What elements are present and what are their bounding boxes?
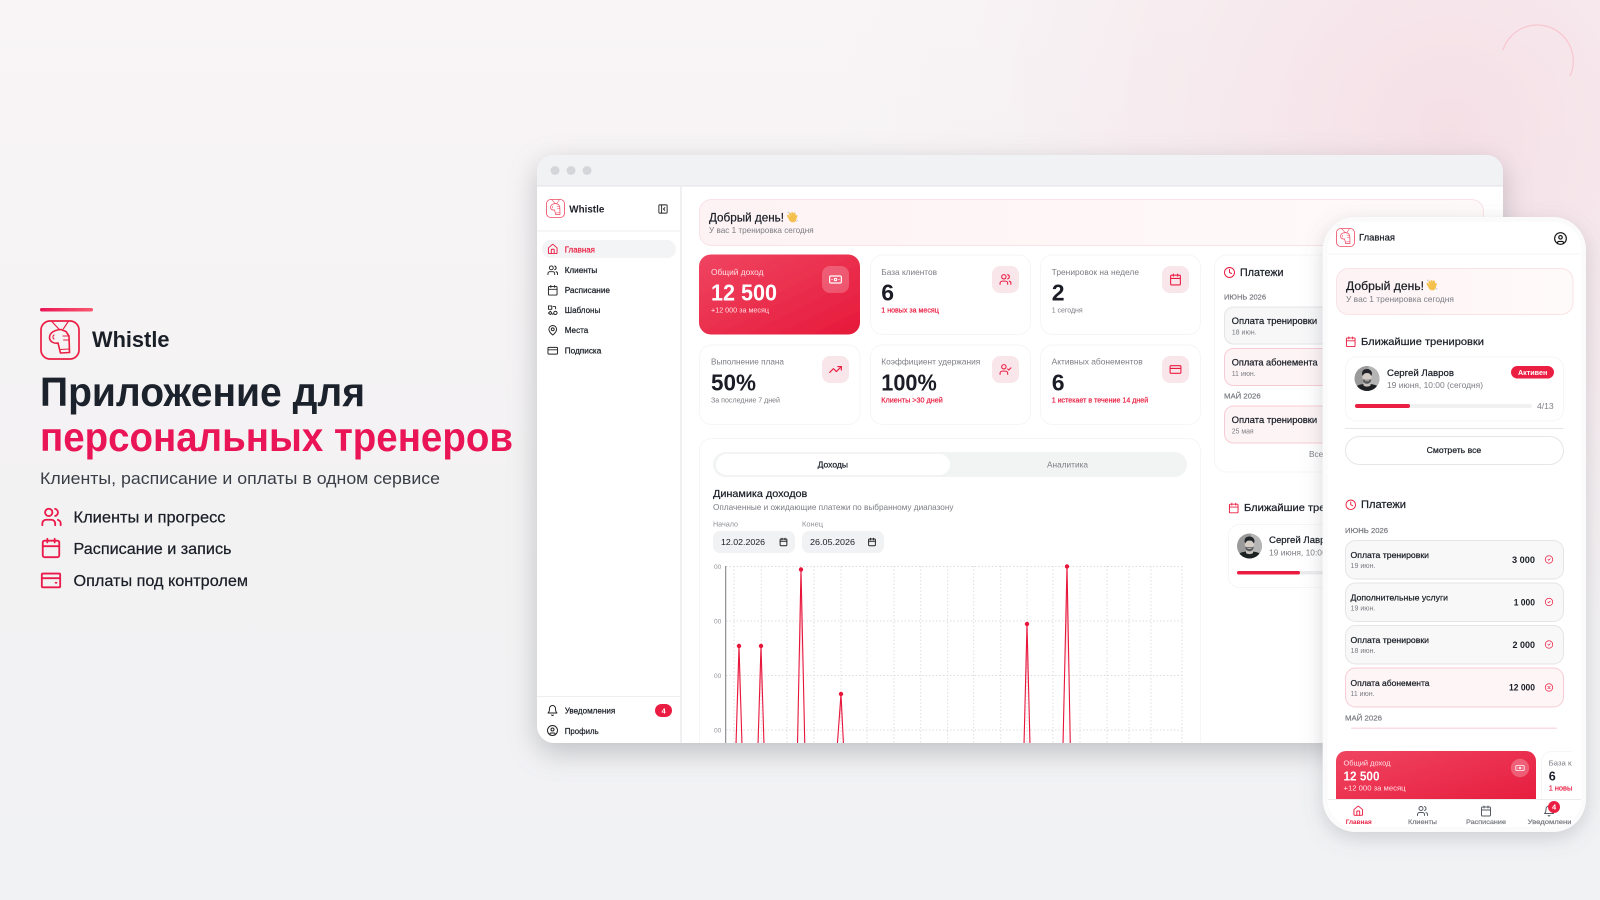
payment row: 19 июн. xyxy=(1350,561,1376,570)
stat card: total income: +12 000 за месяц xyxy=(711,306,770,315)
stat card: weekly workouts: 1 сегодня xyxy=(1052,306,1083,315)
tab: notifications: 4 xyxy=(1552,803,1557,812)
payment row: 18 июн. xyxy=(1232,327,1257,336)
greeting banner xyxy=(700,200,1484,246)
phone section: payments xyxy=(1345,499,1564,729)
greeting banner: У вас 1 тренировка сегодня xyxy=(709,225,814,235)
stat card: client base xyxy=(870,255,1030,334)
stat card: weekly workouts: Тренировок на неделе xyxy=(1052,267,1139,277)
tab: clients xyxy=(1408,806,1437,826)
panel: upcoming workouts (desktop): Сергей Лавров xyxy=(1269,535,1336,546)
tab: schedule: Расписание xyxy=(1466,819,1506,826)
tabs: Аналитика xyxy=(1047,459,1088,469)
payment row: 25 мая xyxy=(1232,426,1254,435)
phone section: payments: Платежи xyxy=(1361,499,1406,511)
line chart: 00 xyxy=(714,564,722,571)
tabs xyxy=(713,452,1187,477)
date filter: start xyxy=(713,522,795,553)
stat card: plan completion: 50% xyxy=(711,370,756,396)
stat card: retention: 100% xyxy=(881,370,937,396)
phone stat cards xyxy=(1336,751,1572,799)
sidebar xyxy=(537,186,682,743)
feature: payments: Оплаты под контролем xyxy=(74,573,248,590)
payment row: Оплата тренировки xyxy=(1350,635,1429,645)
phone bottom nav xyxy=(1328,799,1581,826)
chart heading: Оплаченные и ожидающие платежи по выбранному диапазону xyxy=(713,502,954,512)
phone greeting xyxy=(1336,268,1573,314)
tab: home: Главная xyxy=(1346,819,1372,826)
stat card: active subscriptions: 1 истекает в течение 14 дней xyxy=(1052,396,1148,404)
payment row: 19 июн. xyxy=(1350,604,1376,612)
payment row: 18 июн. xyxy=(1350,646,1376,655)
panel: upcoming workouts (desktop): Ближайшие тренировки xyxy=(1244,502,1367,514)
nav: places: Места xyxy=(565,325,589,335)
nav: notifications: 4 xyxy=(662,706,666,715)
stat card: active subscriptions xyxy=(1040,345,1200,424)
tab: home xyxy=(1346,806,1372,826)
stat card: total income xyxy=(699,254,860,334)
panel: payments xyxy=(1214,254,1323,472)
payment row: 1 000 xyxy=(1514,597,1535,607)
workout card xyxy=(1346,357,1564,421)
payment row xyxy=(1346,668,1564,707)
payment row: Оплата тренировки xyxy=(1232,415,1317,425)
button: Смотреть все xyxy=(1427,445,1481,455)
payment row: Оплата тренировки xyxy=(1350,550,1429,560)
nav: places xyxy=(549,325,589,335)
nav: subscription: Подписка xyxy=(565,346,602,356)
phone section: upcoming workouts: Ближайшие тренировки xyxy=(1361,336,1484,348)
subtitle: Клиенты, расписание и оплаты в одном сервисе xyxy=(40,469,440,488)
payment row: 11 июн. xyxy=(1232,369,1256,378)
phone card: client base xyxy=(1541,751,1572,799)
phone greeting: У вас 1 тренировка сегодня xyxy=(1346,294,1454,304)
phone card: income: +12 000 за месяц xyxy=(1344,784,1406,793)
tab: notifications: Уведомления xyxy=(1528,819,1576,826)
payment row: 3 000 xyxy=(1512,555,1535,565)
payment row: Оплата абонемента xyxy=(1232,358,1319,368)
line chart: 00 xyxy=(714,728,722,734)
chart heading: Динамика доходов xyxy=(713,488,808,500)
nav: active: Главная xyxy=(565,244,595,254)
icon: whistle logo xyxy=(41,321,79,359)
title xyxy=(40,369,513,460)
chart heading xyxy=(713,488,954,512)
title: персональных тренеров xyxy=(40,414,513,460)
browser window xyxy=(537,155,1503,768)
nav: active xyxy=(542,240,676,258)
phone header: Главная xyxy=(1359,233,1395,244)
accent bar xyxy=(40,308,93,312)
stat card: active subscriptions: 6 xyxy=(1052,370,1064,396)
stat card: plan completion: Выполнение плана xyxy=(711,356,784,366)
payment row: 2 000 xyxy=(1512,640,1535,650)
panel: income chart xyxy=(700,438,1200,768)
phone card: income: 12 500 xyxy=(1344,770,1380,784)
stat card: weekly workouts xyxy=(1040,255,1200,334)
panel: payments: ИЮНЬ 2026 xyxy=(1224,293,1266,302)
feature: schedule: Расписание и запись xyxy=(74,541,232,558)
nav: subscription xyxy=(548,346,602,356)
stat card: retention: Коэффициент удержания xyxy=(881,356,980,366)
phone card: income: Общий доход xyxy=(1344,759,1391,768)
button xyxy=(1346,436,1564,464)
workout card: 4/13 xyxy=(1537,401,1554,411)
stat card: weekly workouts: 2 xyxy=(1052,280,1064,306)
phone greeting: Добрый день! xyxy=(1346,279,1424,293)
title: Приложение для xyxy=(40,369,365,415)
sidebar logo xyxy=(546,199,667,218)
phone mockup xyxy=(1323,217,1600,832)
tab: schedule xyxy=(1466,806,1506,826)
phone header xyxy=(1328,228,1581,254)
nav: templates xyxy=(548,305,600,315)
payment row: 11 июн. xyxy=(1350,689,1374,698)
feature: clients: Клиенты и прогресс xyxy=(74,510,226,526)
panel: upcoming workouts (desktop): 19 июня, 10:00 (сегодня) xyxy=(1269,548,1365,558)
date filter: start: 12.02.2026 xyxy=(721,537,765,547)
decorative arc xyxy=(1503,25,1573,76)
tab: clients: Клиенты xyxy=(1408,819,1437,826)
workout card: Сергей Лавров xyxy=(1387,368,1454,379)
payment row: Оплата абонемента xyxy=(1350,678,1430,688)
stat card: client base: База клиентов xyxy=(881,267,938,277)
nav: schedule: Расписание xyxy=(565,285,610,295)
stat card: client base: 6 xyxy=(881,280,894,306)
phone section: upcoming workouts xyxy=(1345,336,1564,464)
date filter: end: Конец xyxy=(802,522,823,529)
nav: profile: Профиль xyxy=(565,726,599,736)
line chart: 00 xyxy=(714,673,722,680)
stat card: total income: Общий доход xyxy=(711,267,764,277)
payment row xyxy=(1224,406,1323,444)
payment row: Оплата тренировки xyxy=(1232,316,1317,326)
payment row xyxy=(1346,626,1564,664)
nav: templates: Шаблоны xyxy=(565,305,600,315)
phone card: client base: База клиентов xyxy=(1549,759,1600,768)
sidebar logo: Whistle xyxy=(569,204,604,216)
nav: profile xyxy=(548,726,599,736)
line chart xyxy=(714,564,1182,745)
phone section: payments: МАЙ 2026 xyxy=(1345,714,1382,722)
stat card: client base: 1 новых за месяц xyxy=(881,306,940,315)
stat card: plan completion: За последние 7 дней xyxy=(711,396,780,404)
line chart: 00 xyxy=(714,618,722,626)
greeting banner: Добрый день! xyxy=(709,211,784,225)
stat card: total income: 12 500 xyxy=(711,280,777,306)
phone card: client base: 6 xyxy=(1549,770,1556,784)
stat card: retention xyxy=(870,345,1030,424)
nav: notifications xyxy=(548,704,672,717)
payment row xyxy=(1224,348,1323,386)
nav: clients xyxy=(548,265,597,275)
left hero block xyxy=(40,308,513,590)
panel: payments: Все xyxy=(1309,449,1324,459)
payment row xyxy=(1346,583,1564,622)
stat card: active subscriptions: Активных абонементов xyxy=(1052,356,1143,366)
window title bar xyxy=(537,155,1503,186)
payment row: Дополнительные услуги xyxy=(1350,592,1448,602)
date filter: end: 26.05.2026 xyxy=(810,537,855,547)
payment row: 12 000 xyxy=(1509,682,1535,692)
payment row xyxy=(1346,540,1564,579)
workout card: Активен xyxy=(1518,368,1547,377)
date filter: end xyxy=(802,522,884,553)
stat card: retention: Клиенты >30 дней xyxy=(881,396,943,404)
tab: notifications xyxy=(1528,801,1571,826)
phone section: payments: ИЮНЬ 2026 xyxy=(1345,526,1388,535)
tabs: Доходы xyxy=(818,459,848,469)
payment row xyxy=(1224,306,1323,344)
panel: upcoming workouts (desktop) xyxy=(1228,502,1323,588)
phone card: income xyxy=(1336,751,1536,799)
brand name: Whistle xyxy=(92,327,170,352)
workout card: 19 июня, 10:00 (сегодня) xyxy=(1387,380,1483,390)
nav: clients: Клиенты xyxy=(565,265,597,275)
nav: notifications: Уведомления xyxy=(565,706,615,716)
panel: payments: Платежи xyxy=(1240,267,1284,279)
date filter: start: Начало xyxy=(713,522,738,529)
panel: payments: МАЙ 2026 xyxy=(1224,392,1261,401)
stat card: plan completion xyxy=(700,345,860,424)
